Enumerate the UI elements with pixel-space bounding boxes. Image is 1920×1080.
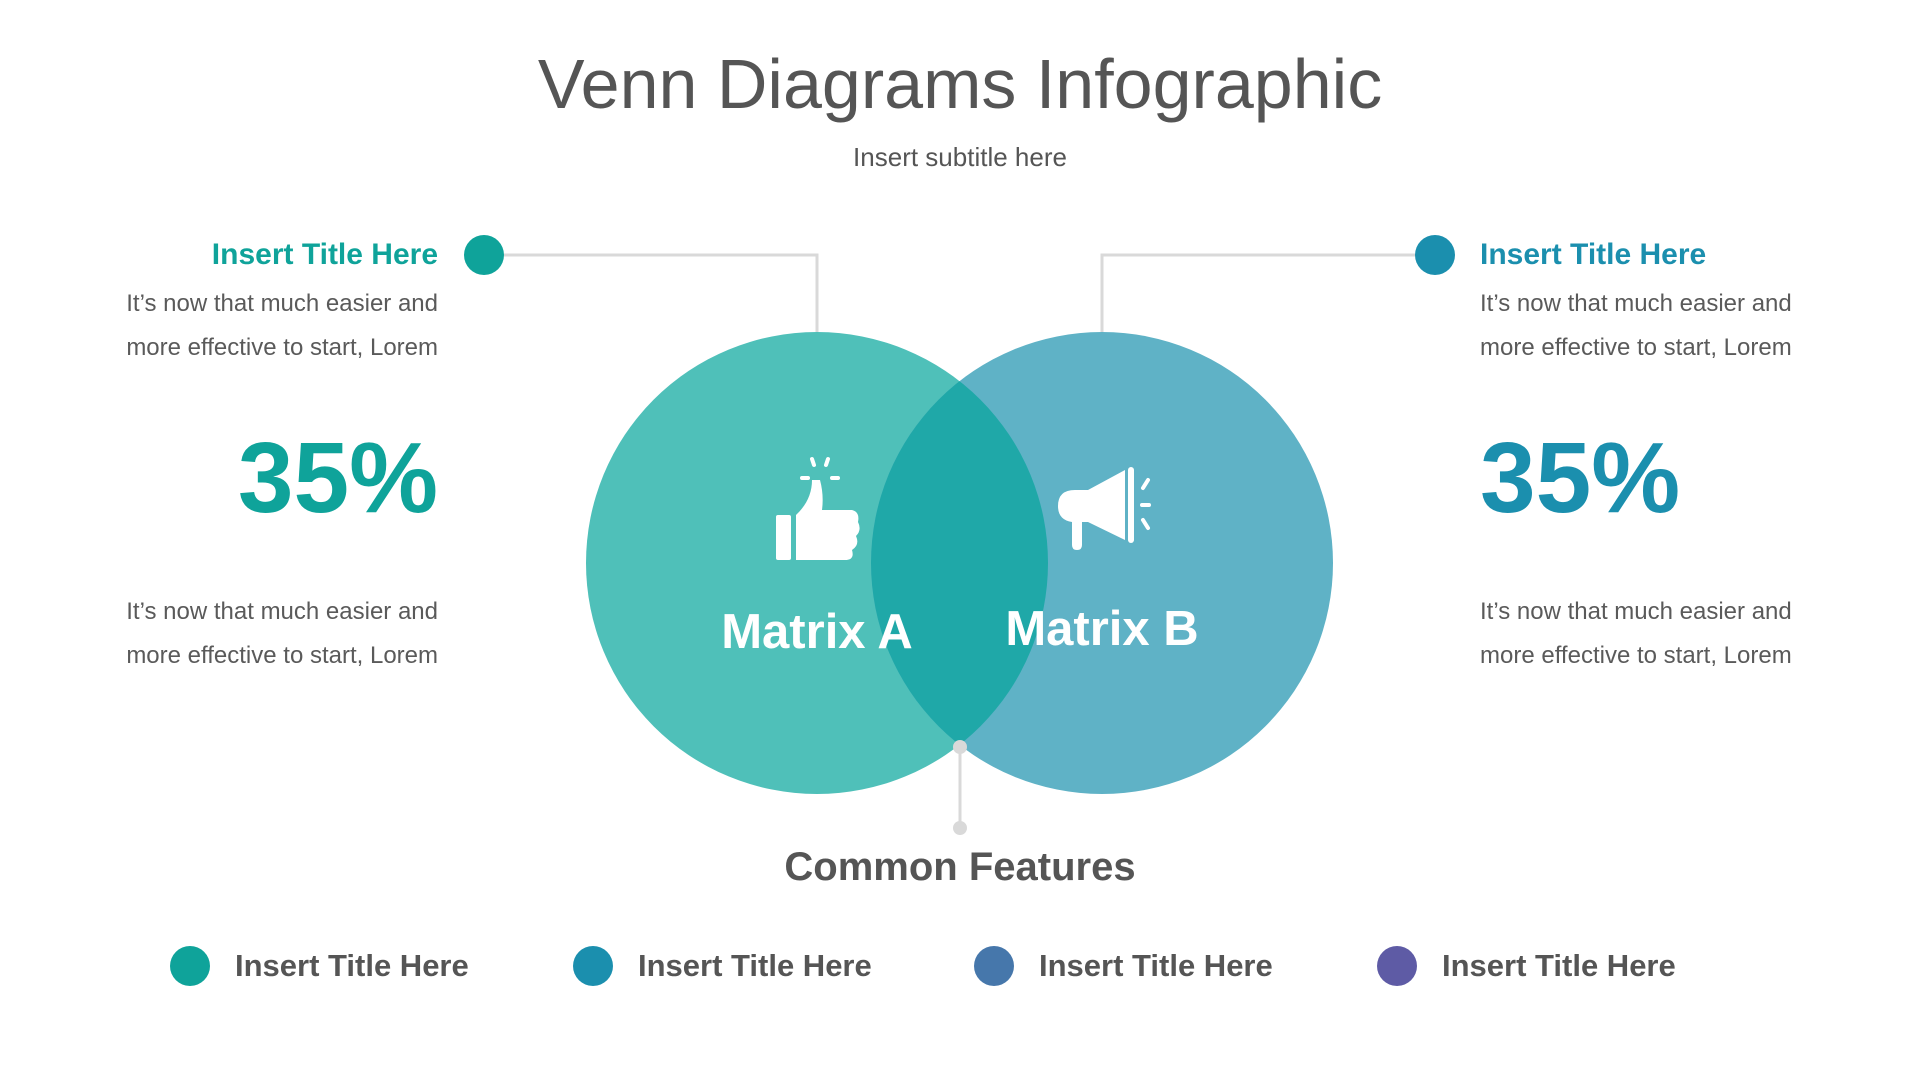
legend item 2 — [573, 946, 872, 986]
right percent: 35% — [1480, 422, 1680, 534]
legend item 1: Insert Title Here — [235, 948, 469, 983]
left text top — [126, 290, 438, 361]
left heading: Insert Title Here — [212, 238, 438, 271]
venn diagram — [464, 235, 1455, 835]
left text bottom: It’s now that much easier and — [126, 598, 438, 625]
left text bottom — [126, 598, 438, 669]
legend item 1 — [170, 946, 469, 986]
legend item 4: Insert Title Here — [1442, 948, 1676, 983]
label: Matrix B: Matrix B — [1005, 602, 1199, 656]
left text top: more effective to start, Lorem — [126, 334, 438, 361]
icon: thumbs up — [776, 459, 860, 560]
right panel — [1480, 238, 1792, 669]
label: Matrix A: Matrix A — [721, 605, 913, 659]
right text bottom — [1480, 598, 1792, 669]
left text bottom: more effective to start, Lorem — [126, 642, 438, 669]
common features label: Common Features — [784, 845, 1136, 889]
right text bottom: It’s now that much easier and — [1480, 598, 1792, 625]
legend — [170, 946, 1676, 986]
connector lines — [484, 255, 1435, 828]
legend item 4 — [1377, 946, 1676, 986]
legend item 2: Insert Title Here — [638, 948, 872, 983]
icon: megaphone — [1058, 467, 1149, 550]
right heading: Insert Title Here — [1480, 238, 1706, 271]
right text top — [1480, 290, 1792, 361]
circle A — [586, 332, 1048, 794]
right text top: more effective to start, Lorem — [1480, 334, 1792, 361]
subtitle: Insert subtitle here — [853, 142, 1067, 172]
right text top: It’s now that much easier and — [1480, 290, 1792, 317]
circle B — [871, 332, 1333, 794]
legend item 3: Insert Title Here — [1039, 948, 1273, 983]
left text top: It’s now that much easier and — [126, 290, 438, 317]
left percent: 35% — [238, 422, 438, 534]
left panel — [126, 238, 438, 669]
title: Venn Diagrams Infographic — [538, 45, 1382, 123]
dots — [464, 235, 1455, 835]
right text bottom: more effective to start, Lorem — [1480, 642, 1792, 669]
legend item 3 — [974, 946, 1273, 986]
